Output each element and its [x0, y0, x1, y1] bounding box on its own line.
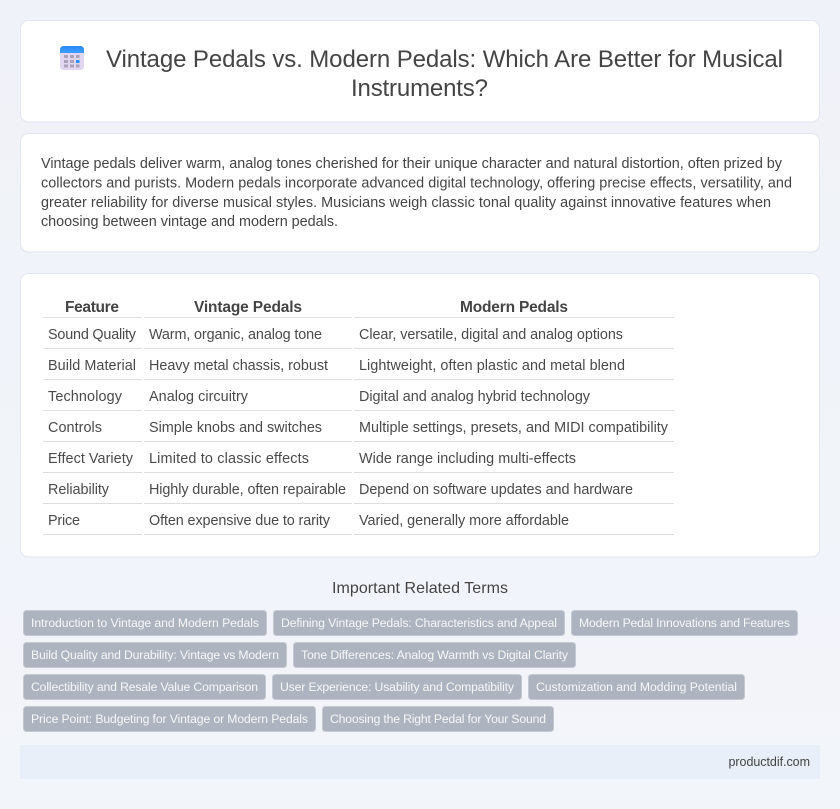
- row: controls: Controls: [48, 420, 102, 436]
- row: effect variety: Effect Variety: [48, 451, 134, 467]
- tag: User Experience: Usability and Compatibility: [280, 680, 515, 694]
- tag: [528, 674, 744, 700]
- heading: related terms: Important Related Terms: [332, 580, 508, 597]
- intro paragraph: [41, 156, 792, 230]
- row: technology: Technology: [48, 389, 123, 405]
- row: build material: Lightweight, often plastic and metal blend: [359, 358, 625, 374]
- tag: [24, 674, 266, 700]
- row: price: Varied, generally more affordable: [359, 513, 569, 529]
- row: reliability: Reliability: [48, 482, 110, 498]
- footer: productdif.com: [728, 755, 810, 769]
- tag: Tone Differences: Analog Warmth vs Digital Clarity: [301, 648, 569, 662]
- row: sound quality: [43, 327, 674, 349]
- icon: calendar: [60, 46, 84, 70]
- table header row: Vintage Pedals: [194, 299, 302, 316]
- title: [106, 46, 783, 102]
- row: price: Price: [48, 513, 80, 529]
- tag: Choosing the Right Pedal for Your Sound: [330, 712, 546, 726]
- panel: header: [20, 20, 820, 122]
- row: effect variety: Wide range including multi-effects: [359, 451, 576, 467]
- row: reliability: [43, 482, 674, 504]
- tag: [24, 610, 266, 636]
- row: build material: [43, 358, 674, 380]
- tag: [272, 674, 522, 700]
- intro paragraph: choosing between vintage and modern pedals.: [41, 214, 338, 230]
- tag: [322, 706, 554, 732]
- intro paragraph: collectors and purists. Modern pedals incorporate advanced digital technology, offering precise effects, versatility, and: [41, 176, 792, 192]
- tag: Defining Vintage Pedals: Characteristics and Appeal: [281, 616, 557, 630]
- panel: comparison table: [20, 274, 820, 557]
- row: price: Often expensive due to rarity: [149, 513, 331, 529]
- panel: intro text: [20, 134, 820, 252]
- intro paragraph: greater reliability for diverse musical styles. Musicians weigh classic tonal quality against innovative features when: [41, 195, 771, 211]
- row: build material: Heavy metal chassis, robust: [149, 358, 328, 374]
- tag: Collectibility and Resale Value Comparison: [31, 680, 258, 694]
- row: effect variety: [43, 451, 674, 473]
- row: sound quality: Warm, organic, analog tone: [149, 327, 322, 343]
- tag: [572, 610, 798, 636]
- row: build material: Build Material: [48, 358, 136, 374]
- intro paragraph: Vintage pedals deliver warm, analog tones cherished for their unique character and natural distortion, often prized by: [41, 156, 783, 172]
- row: technology: [43, 389, 674, 411]
- row: controls: Multiple settings, presets, and MIDI compatibility: [359, 420, 669, 436]
- row: reliability: Depend on software updates and hardware: [359, 482, 633, 498]
- tag: Introduction to Vintage and Modern Pedals: [31, 616, 259, 630]
- row: reliability: Highly durable, often repairable: [149, 482, 346, 498]
- tag: [24, 706, 316, 732]
- tag: Modern Pedal Innovations and Features: [579, 616, 790, 630]
- row: controls: [43, 420, 674, 442]
- tag: Build Quality and Durability: Vintage vs Modern: [31, 648, 279, 662]
- row: effect variety: Limited to classic effects: [149, 451, 309, 467]
- title: Instruments?: [351, 75, 488, 102]
- tag: Customization and Modding Potential: [536, 680, 737, 694]
- row: technology: Analog circuitry: [149, 389, 249, 405]
- footer: [20, 745, 820, 779]
- row: price: [43, 513, 674, 535]
- table header row: Modern Pedals: [460, 299, 568, 316]
- title: Vintage Pedals vs. Modern Pedals: Which Are Better for Musical: [106, 46, 783, 73]
- row: sound quality: Clear, versatile, digital and analog options: [359, 327, 623, 343]
- related term tags: [24, 610, 798, 732]
- row: controls: Simple knobs and switches: [149, 420, 322, 436]
- table header row: [43, 299, 674, 318]
- tag: [274, 610, 564, 636]
- tag: [294, 642, 576, 668]
- tag: Price Point: Budgeting for Vintage or Modern Pedals: [31, 712, 308, 726]
- row: technology: Digital and analog hybrid technology: [359, 389, 591, 405]
- row: sound quality: Sound Quality: [48, 327, 137, 343]
- table header row: Feature: [65, 299, 119, 316]
- tag: [24, 642, 286, 668]
